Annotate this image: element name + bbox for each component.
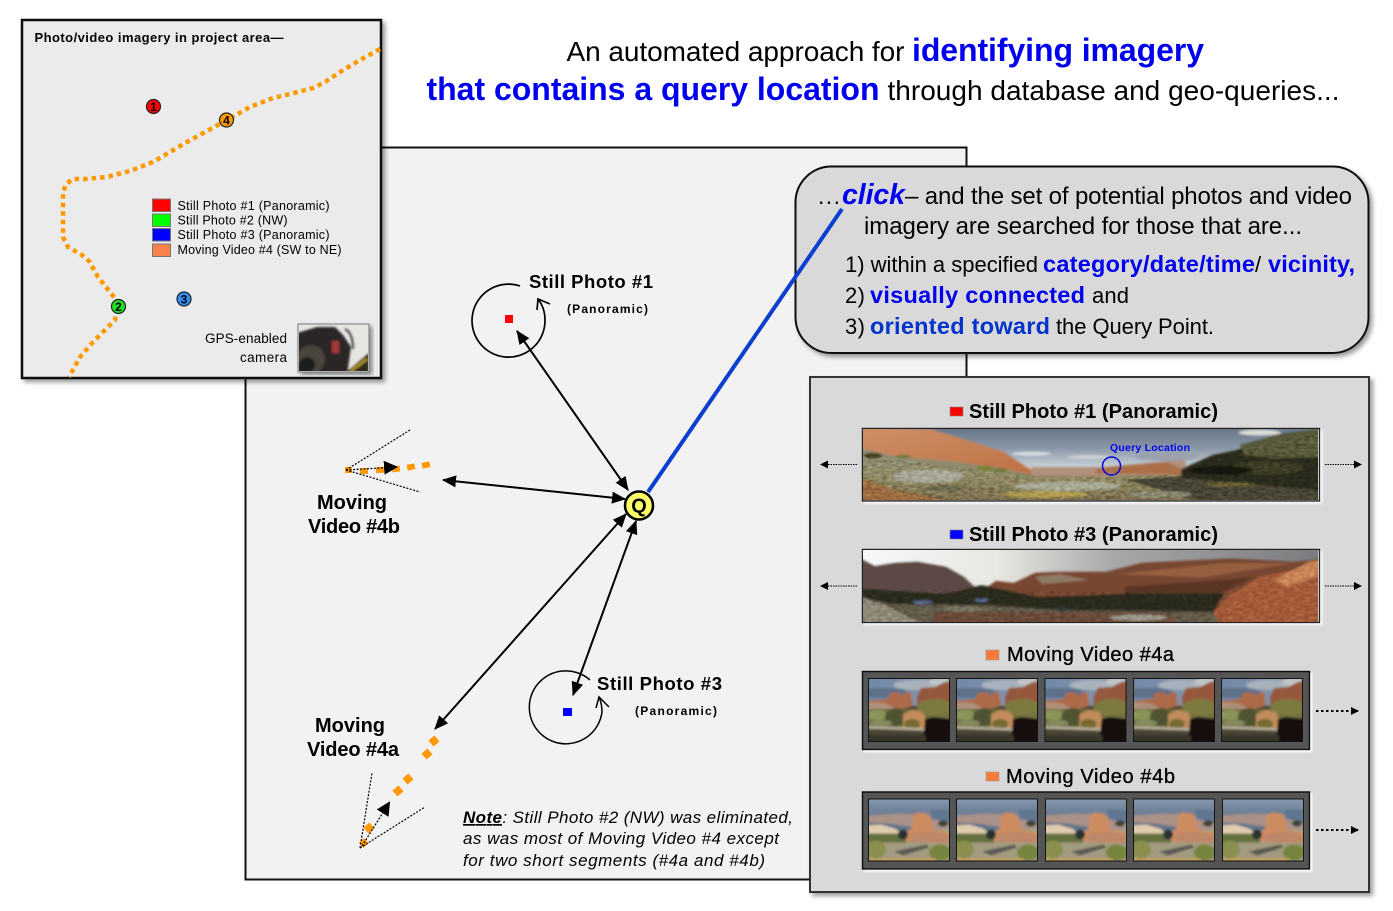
photo: Still Photo 1 panorama — [857, 423, 1324, 503]
callout: search criteria: vicinity, — [1268, 251, 1355, 277]
filmstrip: Moving Video 4b — [862, 792, 1310, 869]
track segment: Moving Video 4a — [359, 735, 440, 848]
arrow: 4a continues — [1316, 710, 1358, 712]
note: for two short segments (#4a and #4b) — [463, 851, 765, 870]
arrows to query point — [435, 331, 636, 729]
map legend: Still Photo #3 (Panoramic) — [178, 228, 330, 242]
title: identifying imagery — [912, 32, 1204, 68]
label: Moving Video 4b: Moving — [317, 492, 387, 514]
icon: Still Photo 3 view circle — [529, 671, 609, 744]
callout: search criteria: oriented toward — [870, 313, 1050, 339]
map marker 1: 1 — [150, 100, 157, 114]
note — [463, 808, 793, 870]
map marker 3: 3 — [181, 292, 188, 306]
callout: search criteria: 2) — [845, 283, 865, 308]
arrows: photo 3 extends — [821, 585, 1361, 587]
photo: Still Photo 3 panorama — [857, 545, 1324, 625]
icon: query point Q: Q — [631, 496, 647, 518]
callout: search criteria: category/date/time — [1043, 251, 1255, 277]
heading: Still Photo 3: Still Photo #3 (Panoramic) — [969, 524, 1218, 546]
callout: search criteria: visually connected — [870, 282, 1085, 308]
label: Still Photo 1: Still Photo #1 — [529, 271, 653, 292]
map marker 2: 2 — [115, 300, 122, 314]
panel: results — [810, 377, 1369, 892]
callout: search criteria: imagery are searched for those that are... — [864, 213, 1302, 240]
callout: search criteria: 1) within a specified — [845, 252, 1038, 277]
map marker 3 — [177, 292, 191, 306]
label: Moving Video 4b — [308, 492, 400, 538]
map legend: Still Photo #1 (Panoramic) — [178, 199, 330, 213]
callout: search criteria: – and the set of potential photos and video — [905, 183, 1352, 210]
label: Still Photo 1 — [529, 271, 653, 316]
title: An automated approach for — [566, 36, 904, 67]
callout: search criteria: and — [1092, 283, 1129, 308]
label: Still Photo 3 — [597, 673, 722, 718]
heading: Still Photo 1: Still Photo #1 (Panoramic) — [969, 401, 1218, 423]
callout: query location: Query Location — [1110, 442, 1190, 454]
map legend — [152, 199, 342, 257]
callout: search criteria: the Query Point. — [1056, 314, 1214, 339]
heading: Moving Video 4a: Moving Video #4a — [1007, 644, 1175, 666]
title: through database and geo-queries... — [888, 75, 1340, 106]
callout: search criteria: ... — [818, 183, 840, 209]
map marker 1 — [146, 100, 160, 114]
callout: search criteria: 3) — [845, 314, 865, 339]
photo: GPS camera — [297, 324, 369, 375]
label: Still Photo 3: (Panoramic) — [635, 704, 717, 718]
panel: main diagram — [246, 148, 966, 880]
camera caption: camera — [240, 350, 287, 365]
label: Moving Video 4a: Moving — [315, 715, 385, 737]
panel: project area map — [22, 20, 381, 378]
arrow: 4b continues — [1316, 829, 1358, 831]
callout: query location — [1102, 442, 1190, 475]
filmstrip: Moving Video 4a — [857, 672, 1310, 750]
arrows: photo 1 extends — [821, 464, 1361, 466]
map marker 2 — [112, 300, 126, 314]
callout: search criteria: click — [842, 179, 907, 211]
map title: Photo/video imagery in project area— — [34, 30, 284, 45]
note: as was most of Moving Video #4 except — [463, 829, 780, 848]
label: Moving Video 4a — [307, 715, 400, 761]
map track: Moving Video 4 — [63, 49, 380, 377]
map marker 4: 4 — [223, 114, 230, 128]
map legend: Still Photo #2 (NW) — [178, 214, 288, 228]
label: Still Photo 3: Still Photo #3 — [597, 673, 722, 694]
note: Note: Still Photo #2 (NW) was eliminated, — [463, 808, 793, 827]
label: Moving Video 4b: Video #4b — [308, 516, 400, 538]
callout: search criteria: / — [1255, 252, 1262, 277]
camera caption — [205, 331, 287, 365]
heading: Moving Video 4b: Moving Video #4b — [1006, 766, 1175, 788]
camera caption: GPS-enabled — [205, 331, 287, 346]
title — [426, 32, 1340, 107]
connector: query point to click — [648, 209, 842, 492]
callout: search criteria — [796, 166, 1368, 353]
label: Moving Video 4a: Video #4a — [307, 739, 400, 761]
map legend: Moving Video #4 (SW to NE) — [178, 243, 342, 257]
icon: query point Q — [625, 492, 653, 520]
label: Still Photo 1: (Panoramic) — [567, 302, 648, 316]
track segment: Moving Video 4b — [345, 430, 431, 492]
title: that contains a query location — [426, 71, 880, 107]
icon: Still Photo 1 view circle — [472, 284, 550, 357]
map marker 4 — [220, 113, 234, 128]
